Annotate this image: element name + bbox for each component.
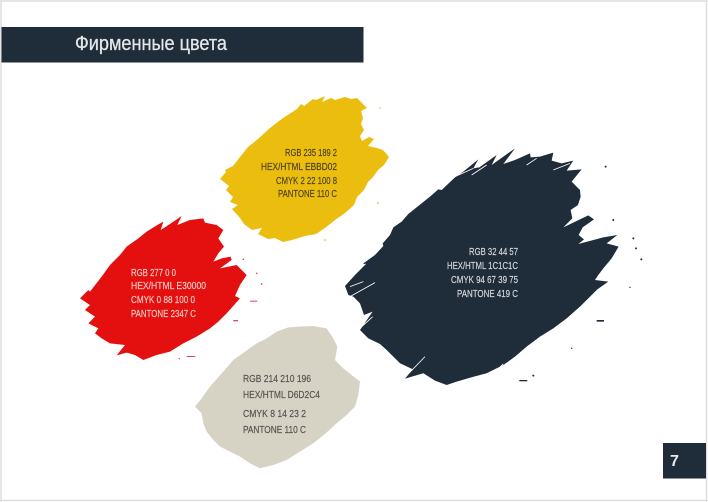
- paint stroke: beige: [195, 326, 360, 468]
- color codes: beige: [243, 374, 320, 436]
- color codes: beige: PANTONE 110 C: [243, 425, 306, 436]
- color codes: navy: CMYK 94 67 39 75: [451, 275, 518, 286]
- color codes: yellow: [261, 148, 337, 200]
- heading: Фирменные цвета: [75, 33, 228, 55]
- panel: yellow swatch: [220, 96, 389, 242]
- panel: beige swatch: [195, 326, 360, 468]
- color codes: navy: PANTONE 419 C: [457, 289, 518, 300]
- color codes: beige: CMYK 8 14 23 2: [243, 409, 306, 420]
- color codes: yellow: CMYK 2 22 100 8: [276, 176, 337, 187]
- color codes: red: [131, 268, 206, 320]
- color codes: beige: HEX/HTML D6D2C4: [243, 390, 320, 401]
- title bar: [2, 27, 364, 62]
- yellow specks: [324, 107, 381, 241]
- color codes: red: CMYK 0 88 100 0: [131, 295, 195, 306]
- color codes: red: HEX/HTML E30000: [131, 281, 206, 292]
- color codes: beige: RGB 214 210 196: [243, 374, 311, 385]
- color codes: navy: HEX/HTML 1C1C1C: [447, 261, 518, 272]
- page number: [663, 443, 706, 478]
- panel: red swatch: [80, 216, 262, 360]
- paint stroke: yellow: [220, 96, 389, 242]
- color codes: red: PANTONE 2347 C: [131, 309, 196, 320]
- color codes: yellow: HEX/HTML EBBD02: [261, 162, 337, 173]
- page number: 7: [670, 453, 679, 470]
- color codes: navy: [447, 247, 518, 300]
- paint stroke: red: [80, 216, 262, 360]
- color codes: yellow: PANTONE 110 C: [278, 189, 337, 200]
- color codes: red: RGB 277 0 0: [131, 268, 176, 279]
- color codes: navy: RGB 32 44 57: [469, 247, 518, 258]
- panel: navy swatch: [345, 148, 642, 385]
- color codes: yellow: RGB 235 189 2: [285, 148, 337, 159]
- paint stroke: navy: [345, 148, 642, 385]
